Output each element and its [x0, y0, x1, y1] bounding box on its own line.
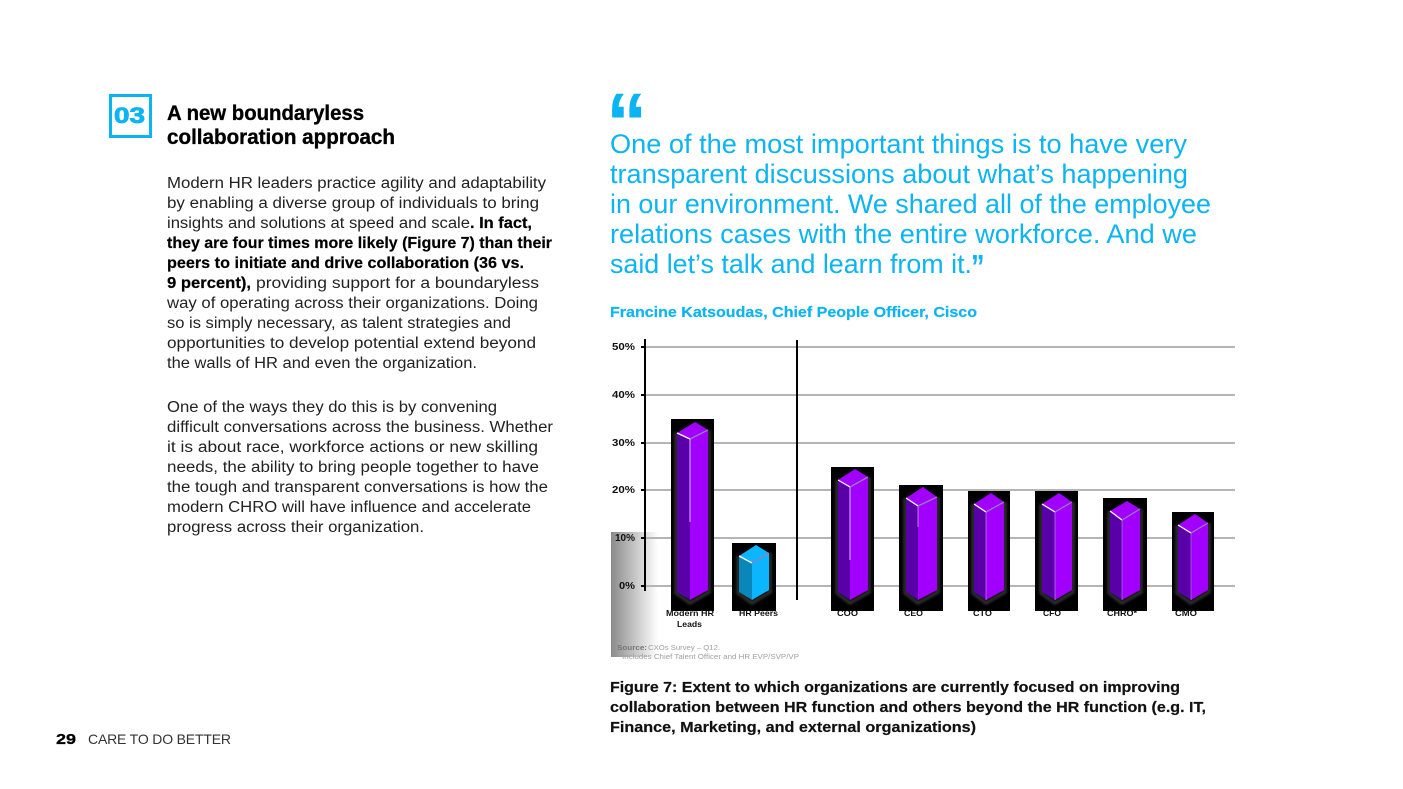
body paragraph 1: opportunities to develop potential extend beyond [167, 335, 536, 352]
y axis labels: 50% [612, 342, 635, 353]
category labels: CMO [1175, 608, 1197, 618]
body paragraph 1: providing support for a boundaryless [256, 275, 539, 292]
pull quote: ” [971, 248, 985, 286]
bar: HR Peers 9% [732, 543, 776, 611]
bar chart [611, 339, 1235, 661]
bar: CFO 20% [1035, 491, 1078, 611]
y axis labels: 0% [619, 581, 635, 592]
quote attribution: Francine Katsoudas, Chief People Officer, Cisco [610, 304, 977, 321]
body paragraph 1: 9 percent), [167, 275, 251, 292]
pull quote: in our environment. We shared all of the employee [610, 189, 1211, 219]
body paragraph 2: progress across their organization. [167, 519, 424, 536]
y axis labels: 10% [615, 533, 635, 544]
figure caption: Finance, Marketing, and external organizations) [610, 719, 976, 736]
body paragraph 1 [166, 175, 552, 372]
y axis labels: 30% [612, 438, 635, 449]
page footer: CARE TO DO BETTER [88, 731, 231, 747]
category labels: CFO [1043, 608, 1061, 618]
body paragraph 2: the tough and transparent conversations is how the [167, 479, 548, 496]
y axis [641, 339, 645, 591]
figure caption: Figure 7: Extent to which organizations are currently focused on improving [610, 679, 1180, 696]
body paragraph 1: the walls of HR and even the organization. [167, 355, 477, 372]
body paragraph 1: . In fact, [470, 215, 532, 232]
bar: CTO 20% [968, 491, 1010, 611]
source note: Source: [617, 643, 647, 652]
body paragraph 2 [167, 399, 553, 536]
source note [617, 643, 799, 661]
bar: CMO 15% [1172, 512, 1214, 611]
section heading: A new boundaryless [167, 102, 364, 125]
body paragraph 1: by enabling a diverse group of individuals to bring [167, 195, 539, 212]
category labels: HR Peers [739, 608, 778, 618]
body paragraph 1: they are four times more likely (Figure 7) than their [167, 235, 552, 252]
section number badge [110, 96, 150, 136]
pull quote: said let’s talk and learn from it. [610, 249, 972, 279]
body paragraph 2: it is about race, workforce actions or new skilling [167, 439, 538, 456]
pull quote [610, 129, 1211, 286]
section number badge: 03 [114, 103, 145, 128]
y axis labels [612, 342, 635, 592]
grid lines [645, 347, 1235, 586]
category labels: CHRO* [1107, 608, 1138, 618]
category labels: CEO [904, 608, 923, 618]
body paragraph 1: peers to initiate and drive collaboration (36 vs. [167, 255, 524, 272]
category labels [666, 608, 1197, 629]
body paragraph 1: way of operating across their organizations. Doing [166, 295, 538, 312]
y axis labels: 20% [612, 485, 635, 496]
bar: COO 25% [831, 467, 874, 611]
body paragraph 1: so is simply necessary, as talent strategies and [167, 315, 511, 332]
pull quote: transparent discussions about what’s happening [610, 159, 1188, 189]
category labels: CTO [973, 608, 992, 618]
bar: CHRO 18% [1103, 498, 1147, 611]
section heading [167, 102, 395, 149]
category labels: COO [837, 608, 858, 618]
figure caption: collaboration between HR function and others beyond the HR function (e.g. IT, [610, 699, 1206, 716]
y axis labels: 40% [612, 390, 635, 401]
page footer: 29 [56, 731, 76, 748]
pull quote: One of the most important things is to have very [610, 129, 1188, 159]
group divider [796, 340, 798, 600]
body paragraph 1: Modern HR leaders practice agility and adaptability [167, 175, 546, 192]
body paragraph 1: insights and solutions at speed and scale [167, 215, 470, 232]
pull quote: relations cases with the entire workforce. And we [610, 219, 1197, 249]
icon: opening quotation mark: “ [606, 76, 647, 170]
gradient artifact behind axis [611, 532, 658, 657]
figure caption [610, 679, 1206, 736]
body paragraph 2: modern CHRO will have influence and accelerate [167, 499, 531, 516]
bar: CEO 21% [899, 485, 943, 611]
category labels: Modern HR [666, 608, 714, 618]
body paragraph 2: needs, the ability to bring people together to have [167, 459, 539, 476]
source note: *Includes Chief Talent Officer and HR EVP/SVP/VP [619, 652, 799, 661]
section heading: collaboration approach [167, 126, 395, 149]
body paragraph 2: difficult conversations across the business. Whether [167, 419, 553, 436]
category labels: Leads [677, 619, 702, 629]
body paragraph 2: One of the ways they do this is by convening [167, 399, 497, 416]
source note: CXOs Survey – Q12. [648, 643, 720, 652]
bar: Modern HR Leads 35% [671, 419, 714, 611]
